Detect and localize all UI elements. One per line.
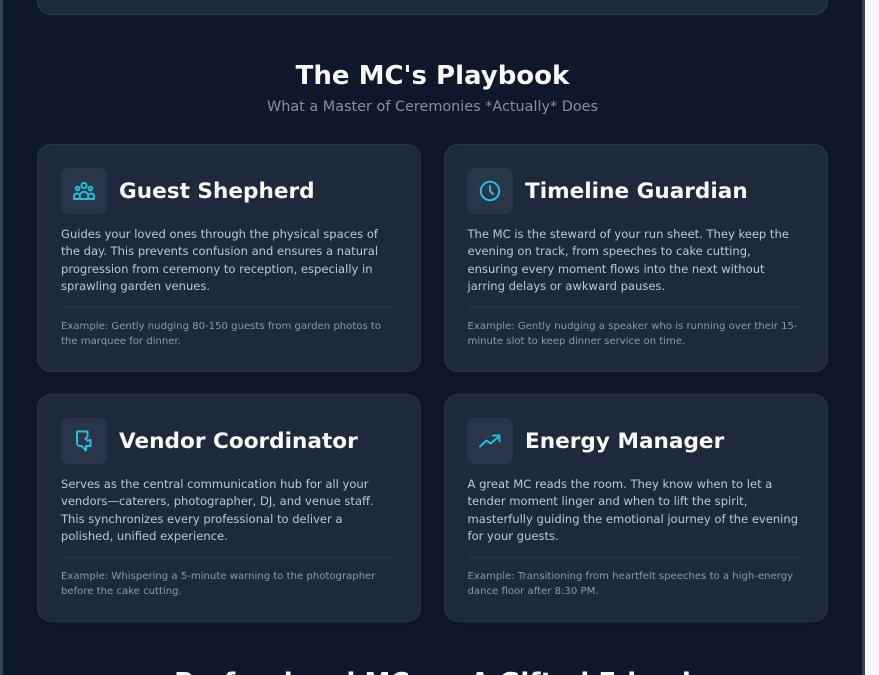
- icon: speech bubble: [61, 418, 107, 464]
- title: The MC's Playbook: [296, 60, 569, 90]
- panel: Timeline Guardian: [444, 144, 828, 372]
- card heading: Timeline Guardian: [525, 179, 748, 204]
- card heading: Guest Shepherd: [119, 179, 315, 204]
- card heading: Energy Manager: [525, 429, 724, 454]
- card example: Example: Gently nudging a speaker who is running over their 15-: [468, 321, 798, 332]
- panel: Vendor Coordinator: [37, 394, 421, 622]
- card description: the day. This prevents confusion and ensures a natural: [61, 244, 378, 258]
- card description: [467, 227, 789, 293]
- panel: Energy Manager: [444, 394, 828, 622]
- card description: sprawling garden venues.: [61, 279, 210, 293]
- card description: polished, unified experience.: [61, 529, 228, 543]
- card description: Serves as the central communication hub for all your: [61, 477, 368, 491]
- card description: masterfully guiding the emotional journey of the evening: [468, 512, 798, 526]
- card example: dance floor after 8:30 PM.: [468, 586, 598, 597]
- icon: group of people: [61, 168, 107, 214]
- previous section card: [37, 0, 828, 15]
- card description: jarring delays or awkward pauses.: [468, 279, 665, 293]
- card description: A great MC reads the room. They know when to let a: [468, 477, 772, 491]
- card description: progression from ceremony to reception, especially in: [61, 262, 373, 276]
- card example: [61, 571, 376, 597]
- card example: Example: Transitioning from heartfelt speeches to a high-energy: [468, 571, 793, 582]
- card description: tender moment linger and when to lift the spirit,: [468, 494, 747, 508]
- card description: This synchronizes every professional to deliver a: [61, 512, 343, 526]
- card example: [468, 321, 798, 347]
- panel: Guest Shepherd: [37, 144, 421, 372]
- card example: the marquee for dinner.: [61, 336, 181, 347]
- card example: [468, 571, 793, 597]
- card example: before the cake cutting.: [61, 586, 182, 597]
- card description: Guides your loved ones through the physical spaces of: [61, 227, 378, 241]
- card example: minute slot to keep dinner service on time.: [468, 336, 685, 347]
- card description: vendors—caterers, photographer, DJ, and venue staff.: [61, 494, 374, 508]
- card description: evening on track, from speeches to cake cutting,: [468, 244, 751, 258]
- icon: clock: [467, 168, 513, 214]
- card description: [61, 227, 378, 293]
- icon: trending up arrow: [467, 418, 513, 464]
- card description: for your guests.: [468, 529, 559, 543]
- card description: [468, 477, 798, 543]
- card example: Example: Gently nudging 80-150 guests from garden photos to: [61, 321, 381, 332]
- card description: ensuring every moment flows into the next without: [468, 262, 765, 276]
- card description: [60, 477, 374, 543]
- card example: [61, 321, 381, 347]
- card example: Example: Whispering a 5-minute warning to the photographer: [61, 571, 375, 582]
- card heading: Vendor Coordinator: [119, 429, 358, 454]
- card description: The MC is the steward of your run sheet. They keep the: [468, 227, 789, 241]
- subtitle: What a Master of Ceremonies *Actually* Does: [267, 98, 598, 114]
